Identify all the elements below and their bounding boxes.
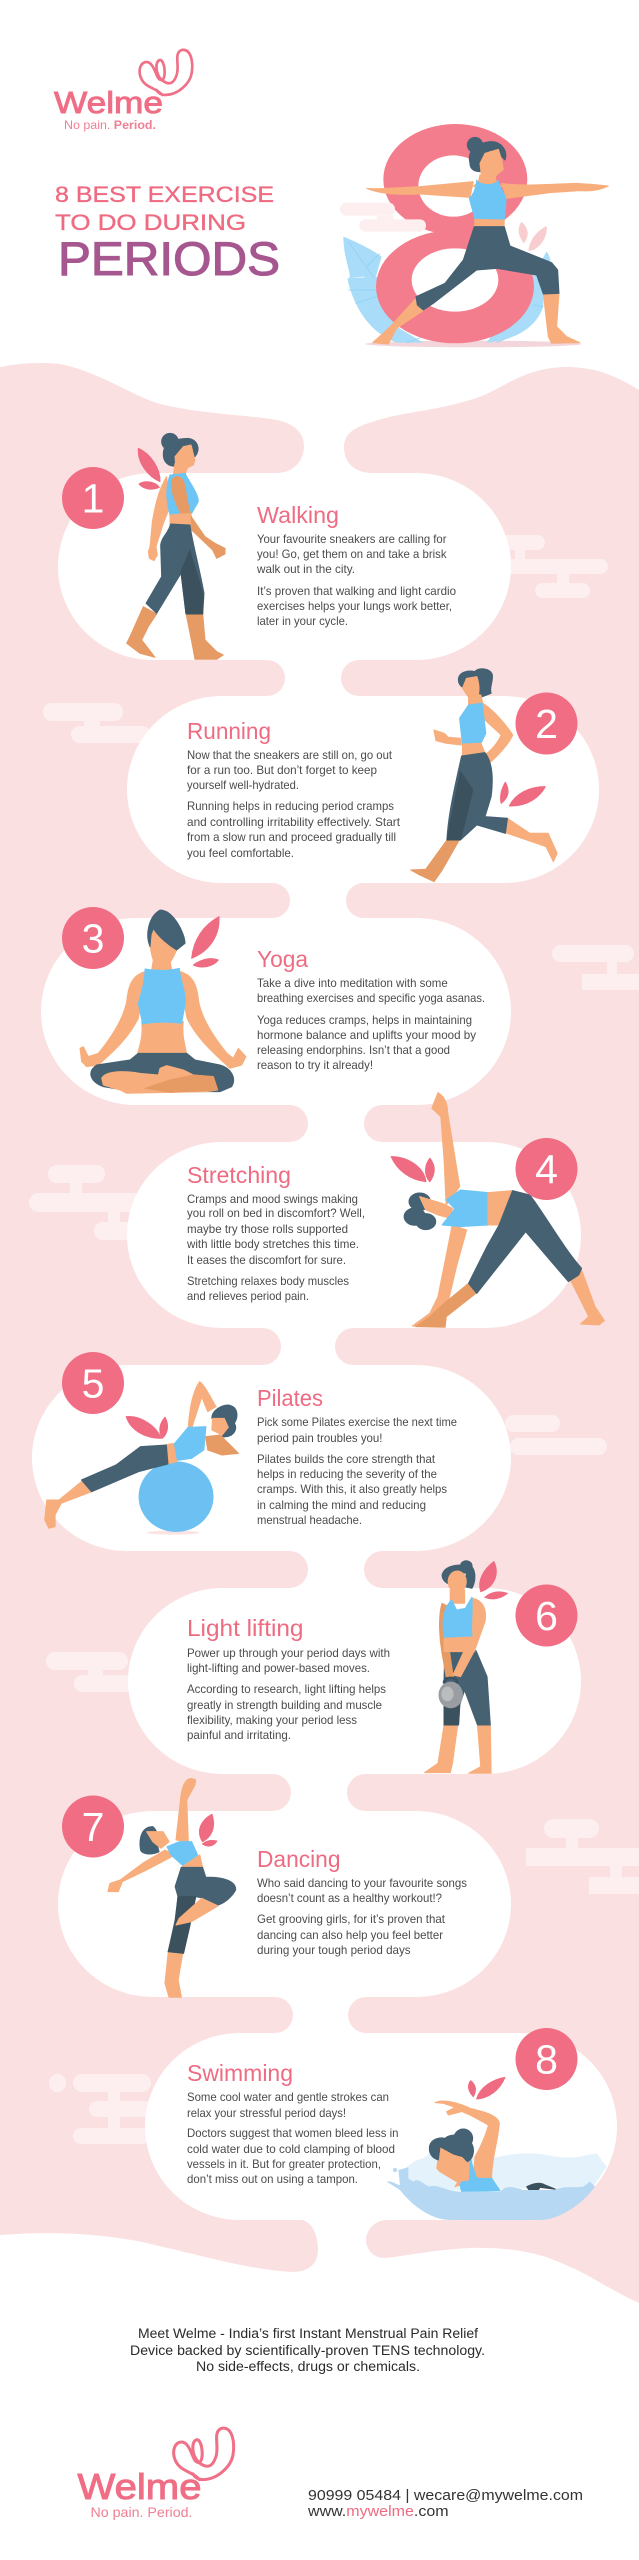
step 8: swimming bbox=[187, 2028, 607, 2220]
heading: Stretching bbox=[187, 1162, 291, 1188]
logo top bbox=[54, 50, 192, 132]
description bbox=[187, 749, 401, 860]
number badge 8: 8 bbox=[535, 2036, 558, 2082]
number badge 2: 2 bbox=[535, 701, 558, 747]
description: cold water due to cold clamping of blood bbox=[187, 2143, 395, 2156]
description: with little body stretches this time. bbox=[186, 1238, 359, 1251]
title bbox=[55, 182, 280, 285]
description: Now that the sneakers are still on, go out bbox=[187, 749, 393, 762]
logo wordmark: Welme bbox=[78, 2466, 202, 2507]
description: flexibility, making your period less bbox=[187, 1714, 357, 1727]
description: don’t miss out on using a tampon. bbox=[187, 2173, 358, 2186]
closing statement: Meet Welme - India’s first Instant Menstrual Pain Relief bbox=[138, 2326, 478, 2341]
decorative clouds bbox=[29, 535, 639, 2144]
description: Get grooving girls, for it’s proven that bbox=[257, 1913, 446, 1926]
description: painful and irritating. bbox=[187, 1729, 291, 1742]
heading: Dancing bbox=[257, 1846, 340, 1872]
heading: Light lifting bbox=[187, 1615, 304, 1641]
pink wavy backdrop bbox=[0, 363, 639, 2303]
description: dancing can also help you feel better bbox=[257, 1929, 443, 1942]
description: Some cool water and gentle strokes can bbox=[187, 2091, 389, 2104]
logo wordmark: Welme bbox=[54, 85, 163, 120]
number badge 4 bbox=[516, 1138, 578, 1200]
description: in calming the mind and reducing bbox=[257, 1499, 426, 1512]
illustration: kettlebell lift bbox=[425, 1561, 507, 1773]
title line 1: 8 BEST EXERCISE bbox=[55, 182, 274, 207]
description: light-lifting and power-based moves. bbox=[187, 1662, 370, 1675]
description bbox=[257, 977, 485, 1072]
illustration: running woman bbox=[411, 669, 557, 882]
description: Who said dancing to your favourite songs bbox=[257, 1877, 467, 1890]
description: hormone balance and uplifts your mood by bbox=[257, 1029, 476, 1042]
number badge 1 bbox=[62, 467, 124, 529]
description: reason to try it already! bbox=[257, 1059, 373, 1072]
description: cramps. With this, it also greatly helps bbox=[257, 1483, 447, 1496]
step 5: pilates bbox=[45, 1352, 457, 1535]
description: Yoga reduces cramps, helps in maintaining bbox=[257, 1014, 472, 1027]
heading: Running bbox=[187, 718, 271, 744]
description: Pilates builds the core strength that bbox=[257, 1453, 436, 1466]
description bbox=[257, 1877, 467, 1957]
number badge 3: 3 bbox=[82, 916, 104, 962]
heading: Pilates bbox=[257, 1385, 323, 1411]
closing statement: No side-effects, drugs or chemicals. bbox=[196, 2359, 420, 2374]
heading: Yoga bbox=[257, 946, 308, 972]
description: It’s proven that walking and light cardio bbox=[257, 585, 456, 598]
step 7: dancing bbox=[62, 1779, 467, 1997]
description: Power up through your period days with bbox=[187, 1647, 390, 1660]
number badge 5: 5 bbox=[82, 1360, 104, 1406]
description: you! Go, get them on and take a brisk bbox=[257, 548, 447, 561]
step 3: yoga bbox=[62, 907, 485, 1093]
hero illustration: big 8 and warrior pose bbox=[340, 124, 608, 347]
title line 3: PERIODS bbox=[58, 232, 280, 285]
contact details: 90999 05484 | wecare@mywelme.com bbox=[308, 2487, 583, 2504]
step 1: walking bbox=[62, 433, 456, 659]
contact details bbox=[307, 2487, 583, 2520]
description: during your tough period days bbox=[257, 1944, 411, 1957]
illustration: dancer bbox=[108, 1779, 236, 1997]
title line 2: TO DO DURING bbox=[55, 210, 246, 235]
illustration: seated meditation bbox=[80, 910, 246, 1093]
description bbox=[257, 1416, 457, 1527]
description: Running helps in reducing period cramps bbox=[187, 800, 394, 813]
closing statement bbox=[130, 2326, 485, 2374]
number badge 6: 6 bbox=[535, 1593, 558, 1639]
white panels bbox=[32, 473, 617, 2220]
illustration: triangle pose bbox=[391, 1093, 604, 1327]
contact details: www.mywelme .com bbox=[307, 2503, 449, 2520]
number badge 7: 7 bbox=[82, 1804, 104, 1850]
description bbox=[256, 533, 456, 628]
description: helps in reducing the severity of the bbox=[257, 1468, 437, 1481]
illustration: walking woman bbox=[127, 433, 225, 659]
description: relax your stressful period days! bbox=[187, 2107, 346, 2120]
description: you feel comfortable. bbox=[187, 847, 294, 860]
description: doesn’t count as a healthy workout!? bbox=[257, 1892, 443, 1905]
logo tagline: No pain. Period. bbox=[64, 118, 156, 132]
number badge 5 bbox=[62, 1352, 124, 1414]
description: Cramps and mood swings making bbox=[187, 1193, 358, 1206]
description bbox=[187, 2091, 398, 2186]
number badge 7 bbox=[62, 1796, 124, 1858]
description: from a slow run and proceed gradually till bbox=[187, 831, 396, 844]
step 2: running bbox=[187, 669, 578, 882]
step 6: light lifting bbox=[187, 1561, 578, 1773]
description: breathing exercises and specific yoga asanas. bbox=[257, 992, 485, 1005]
description: maybe try those rolls supported bbox=[187, 1223, 348, 1236]
description: vessels in it. But for greater protection, bbox=[187, 2158, 381, 2171]
description: period pain troubles you! bbox=[257, 1432, 382, 1445]
description bbox=[186, 1193, 365, 1303]
number badge 8 bbox=[516, 2028, 578, 2090]
number badge 6 bbox=[516, 1584, 578, 1646]
description bbox=[187, 1647, 390, 1742]
number badge 1: 1 bbox=[82, 476, 104, 522]
description: menstrual headache. bbox=[257, 1514, 362, 1527]
closing statement: Device backed by scientifically-proven TENS technology. bbox=[130, 2343, 485, 2358]
description: Doctors suggest that women bleed less in bbox=[187, 2127, 398, 2140]
description: Pick some Pilates exercise the next time bbox=[257, 1416, 457, 1429]
description: exercises helps your lungs work better, bbox=[257, 600, 452, 613]
description: later in your cycle. bbox=[257, 615, 348, 628]
description: It eases the discomfort for sure. bbox=[187, 1254, 346, 1267]
number badge 2 bbox=[516, 692, 578, 754]
logo ribbon mark bbox=[174, 2428, 234, 2480]
description: walk out in the city. bbox=[256, 563, 355, 576]
number badge 4: 4 bbox=[535, 1146, 558, 1192]
illustration: swimmer bbox=[387, 2077, 607, 2220]
logo bottom bbox=[78, 2428, 234, 2520]
heading: Swimming bbox=[187, 2060, 293, 2086]
illustration: pilates on ball bbox=[45, 1382, 238, 1535]
description: and relieves period pain. bbox=[187, 1290, 309, 1303]
description: yourself well-hydrated. bbox=[187, 779, 299, 792]
description: for a run too. But don’t forget to keep bbox=[187, 764, 377, 777]
logo ribbon mark bbox=[140, 50, 192, 95]
description: Take a dive into meditation with some bbox=[257, 977, 448, 990]
description: According to research, light lifting helps bbox=[187, 1683, 386, 1696]
heading: Walking bbox=[257, 502, 339, 528]
description: you roll on bed in discomfort? Well, bbox=[187, 1207, 365, 1220]
description: and controlling irritability effectively. Start bbox=[187, 816, 401, 829]
white channels between panels bbox=[0, 660, 639, 2033]
step 4: stretching bbox=[186, 1093, 604, 1327]
description: Your favourite sneakers are calling for bbox=[257, 533, 447, 546]
logo tagline: No pain. Period. bbox=[90, 2504, 192, 2520]
description: greatly in strength building and muscle bbox=[187, 1699, 382, 1712]
number badge 3 bbox=[62, 907, 124, 969]
description: Stretching relaxes body muscles bbox=[187, 1275, 349, 1288]
description: releasing endorphins. Isn’t that a good bbox=[257, 1044, 450, 1057]
